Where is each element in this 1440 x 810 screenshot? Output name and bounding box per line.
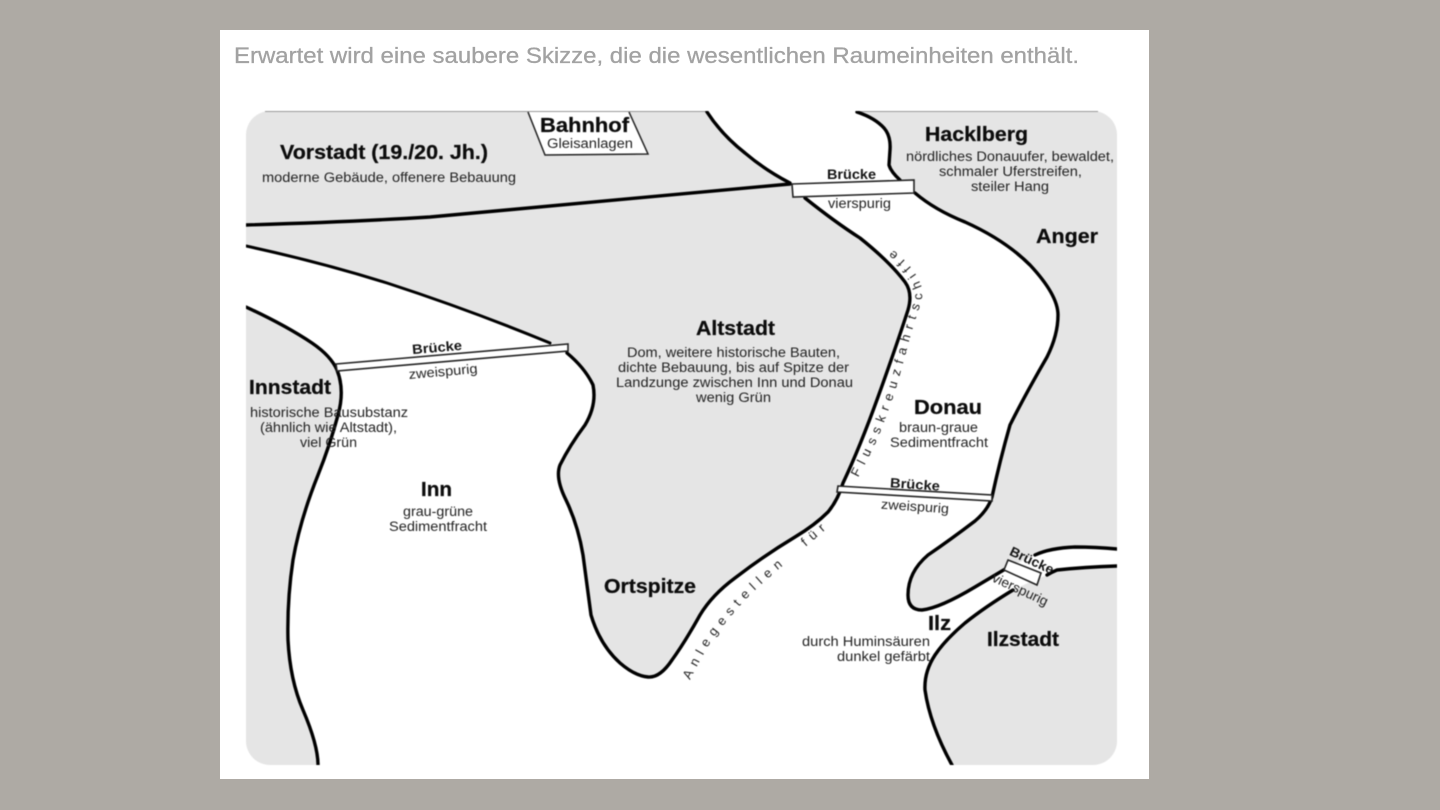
- bridge: Donau four lanes: [792, 180, 914, 197]
- label group: Innstadt: (ähnlich wie Altstadt),: [260, 420, 397, 435]
- label group: Altstadt: [616, 318, 853, 405]
- land areas: [246, 111, 1117, 765]
- panel: white card: [220, 30, 1149, 779]
- label group: bridge Inn: zweispurig: [408, 361, 478, 382]
- bank: Inn west: [246, 307, 341, 765]
- label group: Hacklberg: schmaler Uferstreifen,: [939, 164, 1082, 179]
- bank: Altstadt north: [707, 112, 790, 183]
- Ilz title: Ilz: [928, 613, 951, 635]
- bank: Donau north lower: [908, 193, 1058, 610]
- label group: bridge Ilz: Brücke: [1007, 544, 1057, 577]
- bank: Donau north upper: [857, 112, 900, 180]
- label group: Ilz: dunkel gefärbt: [837, 649, 930, 664]
- label group: Ilz: [802, 613, 951, 664]
- Bahnhof block: [528, 112, 648, 155]
- label group: bridge Donau: zweispurig: [881, 497, 949, 516]
- label group: bridge four lanes: Brücke: [827, 167, 877, 182]
- line: Vorstadt boundary: [246, 184, 790, 225]
- label group: bridge Ilz: vierspurig: [990, 570, 1051, 609]
- label group: bridge Ilz: [990, 544, 1057, 609]
- label: Ortspitze: Ortspitze: [604, 576, 696, 598]
- curved label: Anlegestellen für: Anlegestellen für: [683, 524, 825, 680]
- label group: bridge Donau: [881, 475, 949, 516]
- label group: Altstadt: wenig Grün: [695, 390, 771, 405]
- label group: Inn: Sedimentfracht: [389, 519, 487, 534]
- land: Ilzstadt: [925, 566, 1117, 765]
- label group: bridge Inn: Brücke: [411, 338, 463, 357]
- bridge: Ilz four lanes: [1004, 560, 1041, 585]
- label group: Donau: Sedimentfracht: [890, 435, 988, 450]
- label group: Hacklberg: [906, 124, 1114, 194]
- label group: Innstadt: viel Grün: [300, 435, 357, 450]
- station label: Bahnhof: [540, 115, 629, 137]
- label group: bridge Donau: Brücke: [890, 475, 941, 494]
- label group: bridge four lanes: [827, 167, 891, 211]
- label group: Ilz: durch Huminsäuren: [802, 634, 930, 649]
- label group: Altstadt: dichte Bebauung, bis auf Spitze der: [618, 360, 850, 375]
- bank: Ilz upper: [1035, 547, 1117, 555]
- Vorstadt title: Vorstadt (19./20. Jh.): [280, 142, 488, 164]
- curved label: Flusskreuzfahrtschiffe: Flusskreuzfahrtschiffe: [850, 250, 923, 478]
- station sublabel: Gleisanlagen: [547, 136, 633, 151]
- label group: bridge Inn: [408, 338, 478, 382]
- label: Anger: Anger: [1036, 226, 1098, 248]
- label group: Altstadt: Dom, weitere historische Bauten,: [627, 345, 840, 360]
- label group: bridge four lanes: vierspurig: [828, 196, 891, 211]
- bridge: Donau two lanes: [837, 486, 992, 501]
- label group: Innstadt: historische Bausubstanz: [250, 405, 408, 420]
- river banks: [246, 112, 1117, 765]
- label group: Innstadt: [249, 377, 408, 450]
- label group: Inn: grau-grüne: [403, 504, 473, 519]
- heading: Erwartet wird eine saubere Skizze, die die wesentlichen Raumeinheiten enthält.: [234, 43, 1079, 68]
- label group: Donau: braun-graue: [899, 420, 978, 435]
- Hacklberg title: Hacklberg: [925, 124, 1028, 146]
- Donau title: Donau: [914, 397, 982, 419]
- bank: Ilz east: [925, 590, 1013, 765]
- bank: Altstadt peninsula: [558, 198, 910, 677]
- label group: Donau: [890, 397, 988, 450]
- bank: Inn north: [246, 246, 550, 343]
- land: Innstadt: [246, 307, 341, 765]
- label group: Hacklberg: steiler Hang: [971, 179, 1049, 194]
- label group: Altstadt: Landzunge zwischen Inn und Donau: [616, 375, 853, 390]
- Inn title: Inn: [421, 479, 452, 501]
- bridge: Inn two lanes: [336, 344, 568, 371]
- label group: Hacklberg: nördliches Donauufer, bewaldet,: [906, 149, 1114, 164]
- Vorstadt description: moderne Gebäude, offenere Bebauung: [262, 170, 516, 185]
- bank: Ilz lower: [1047, 566, 1117, 575]
- Innstadt title: Innstadt: [249, 377, 331, 399]
- land: Altstadt and Vorstadt: [246, 111, 910, 677]
- label group: Vorstadt: [262, 142, 516, 185]
- station shape: [528, 112, 648, 155]
- label group: Inn: [389, 479, 487, 534]
- label: Ilzstadt: Ilzstadt: [987, 629, 1059, 651]
- Altstadt title: Altstadt: [696, 318, 775, 340]
- chart: sketch map of Passau: [245, 110, 1118, 766]
- land: Hacklberg and Anger: [857, 111, 1117, 610]
